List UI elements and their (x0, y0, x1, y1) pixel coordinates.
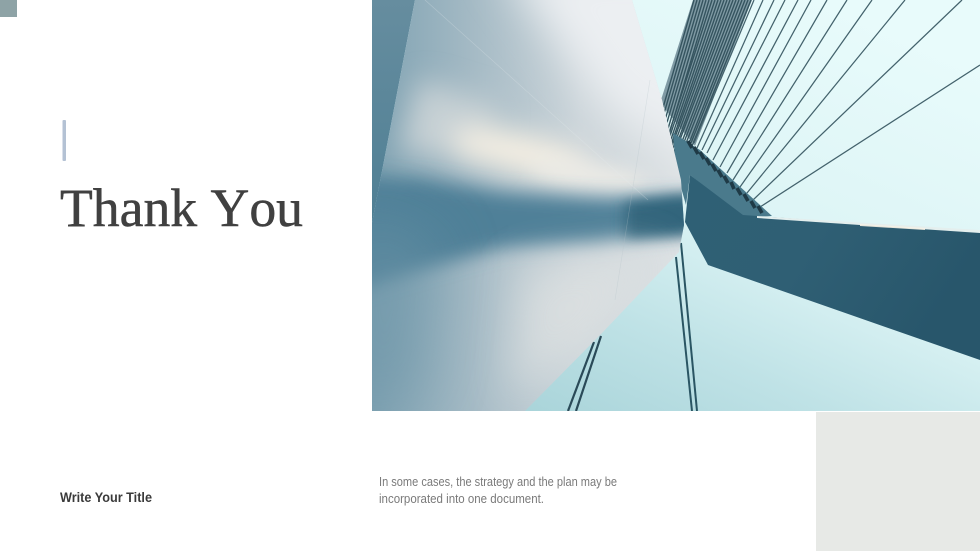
body text: incorporated into one document. (379, 492, 544, 506)
sky (372, 0, 980, 411)
anchor teeth (688, 141, 762, 213)
sail (372, 0, 684, 411)
lower sheen (510, 250, 660, 400)
beam glow (860, 224, 925, 230)
accent bar (62, 120, 66, 161)
deck (673, 133, 772, 217)
main beam (685, 175, 980, 360)
photo: bridge (340, 0, 980, 411)
body text: In some cases, the strategy and the plan may be (379, 475, 617, 489)
shadow band (340, 175, 690, 295)
cables: upper fan (652, 0, 980, 207)
upper sheen (502, 0, 678, 166)
beam lit edge (757, 216, 980, 233)
grey block (816, 412, 980, 551)
lower cables left (568, 336, 601, 411)
left wedge (372, 0, 415, 223)
subtitle: Write Your Title (60, 490, 152, 505)
corner square (0, 0, 17, 17)
body text (379, 475, 617, 506)
title: Thank You (60, 178, 303, 238)
bright glow (445, 117, 595, 189)
lower cables right (676, 243, 697, 411)
crease lines (425, 0, 648, 200)
